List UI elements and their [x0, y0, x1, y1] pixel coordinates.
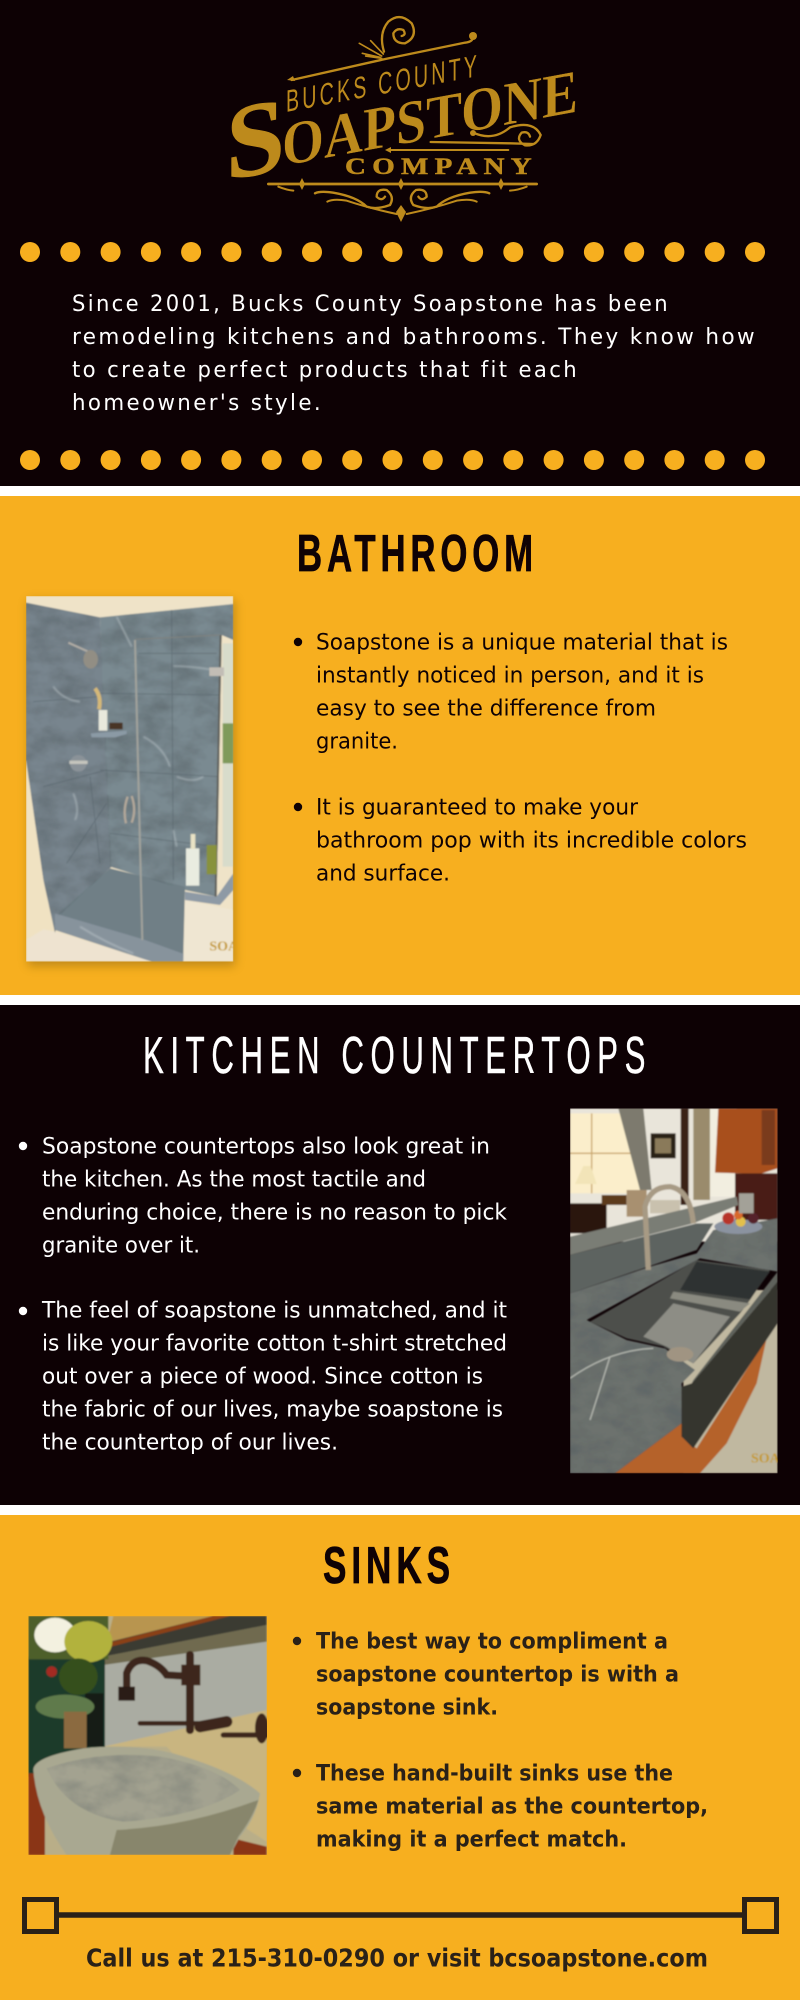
dot row: lower	[20, 450, 765, 470]
panel: kitchen countertops	[0, 1005, 800, 1505]
bullet list: kitchen: The feel of soapstone is unmatched, and it	[41, 1298, 507, 1324]
bullet list: bathroom: easy to see the difference from	[316, 696, 656, 722]
intro text	[72, 291, 757, 416]
bullet list: kitchen	[19, 1134, 507, 1456]
heading: sinks: SINKS	[323, 1537, 455, 1595]
bullet list: bathroom: It is guaranteed to make your	[316, 794, 639, 820]
intro text: homeowner's style.	[72, 390, 323, 416]
dot row: upper	[20, 242, 765, 262]
heading: bathroom: BATHROOM	[297, 525, 538, 583]
intro text: to create perfect products that fit each	[72, 357, 579, 383]
logo: Bucks County Soapstone Company: S	[226, 76, 285, 204]
bullet list: bathroom: granite.	[316, 728, 398, 754]
bullet list: bathroom: bathroom pop with its incredible colors	[316, 828, 747, 854]
bullet list: sinks: These hand-built sinks use the	[316, 1760, 673, 1786]
call to action: Call us at 215-310-0290 or visit bcsoapstone.com	[86, 1944, 708, 1972]
photo: soapstone shower	[26, 596, 238, 966]
photo: kitchen soapstone sink	[570, 1108, 789, 1473]
bullet list: sinks: The best way to compliment a	[316, 1628, 668, 1654]
bullet list: sinks: same material as the countertop,	[316, 1794, 708, 1820]
divider with end squares	[24, 1900, 776, 1932]
logo: Bucks County Soapstone Company	[226, 17, 578, 222]
intro text: remodeling kitchens and bathrooms. They know how	[72, 324, 757, 350]
bullet list: kitchen: the kitchen. As the most tactile and	[42, 1166, 426, 1192]
bullet list: kitchen: the countertop of our lives.	[42, 1430, 338, 1456]
bullet list: bathroom: and surface.	[316, 860, 450, 886]
intro text: Since 2001, Bucks County Soapstone has been	[72, 291, 670, 317]
panel: sinks	[0, 1515, 800, 2000]
photo: kitchen soapstone sink: SOAP	[751, 1452, 789, 1467]
photo: soapstone shower: SOA	[209, 940, 238, 955]
logo: Bucks County Soapstone Company: OAPSTONE	[282, 56, 578, 180]
bullet list: kitchen: Soapstone countertops also look great in	[42, 1134, 490, 1160]
bullet list: bathroom: Soapstone is a unique material that is	[316, 630, 728, 656]
panel: bathroom	[0, 496, 800, 995]
bullet list: kitchen: out over a piece of wood. Since cotton is	[42, 1364, 483, 1390]
bullet list: bathroom	[294, 630, 747, 886]
bullet list: kitchen: the fabric of our lives, maybe soapstone is	[42, 1396, 503, 1422]
bullet list: kitchen: enduring choice, there is no reason to pick	[42, 1200, 507, 1226]
bullet list: kitchen: granite over it.	[42, 1232, 200, 1258]
bullet list: sinks: soapstone sink.	[316, 1694, 498, 1720]
bullet list: sinks	[293, 1628, 708, 1852]
photo: soapstone vessel sink	[28, 1616, 268, 1855]
bullet list: kitchen: is like your favorite cotton t-shirt stretched	[42, 1330, 507, 1356]
logo: Bucks County Soapstone Company: COMPANY	[345, 154, 538, 179]
bullet list: sinks: soapstone countertop is with a	[316, 1662, 679, 1688]
bullet list: sinks: making it a perfect match.	[316, 1826, 627, 1852]
panel: intro header	[0, 0, 800, 486]
logo: Bucks County Soapstone Company: BUCKS COUNTY	[286, 48, 480, 119]
bullet list: bathroom: instantly noticed in person, and it is	[316, 662, 704, 688]
